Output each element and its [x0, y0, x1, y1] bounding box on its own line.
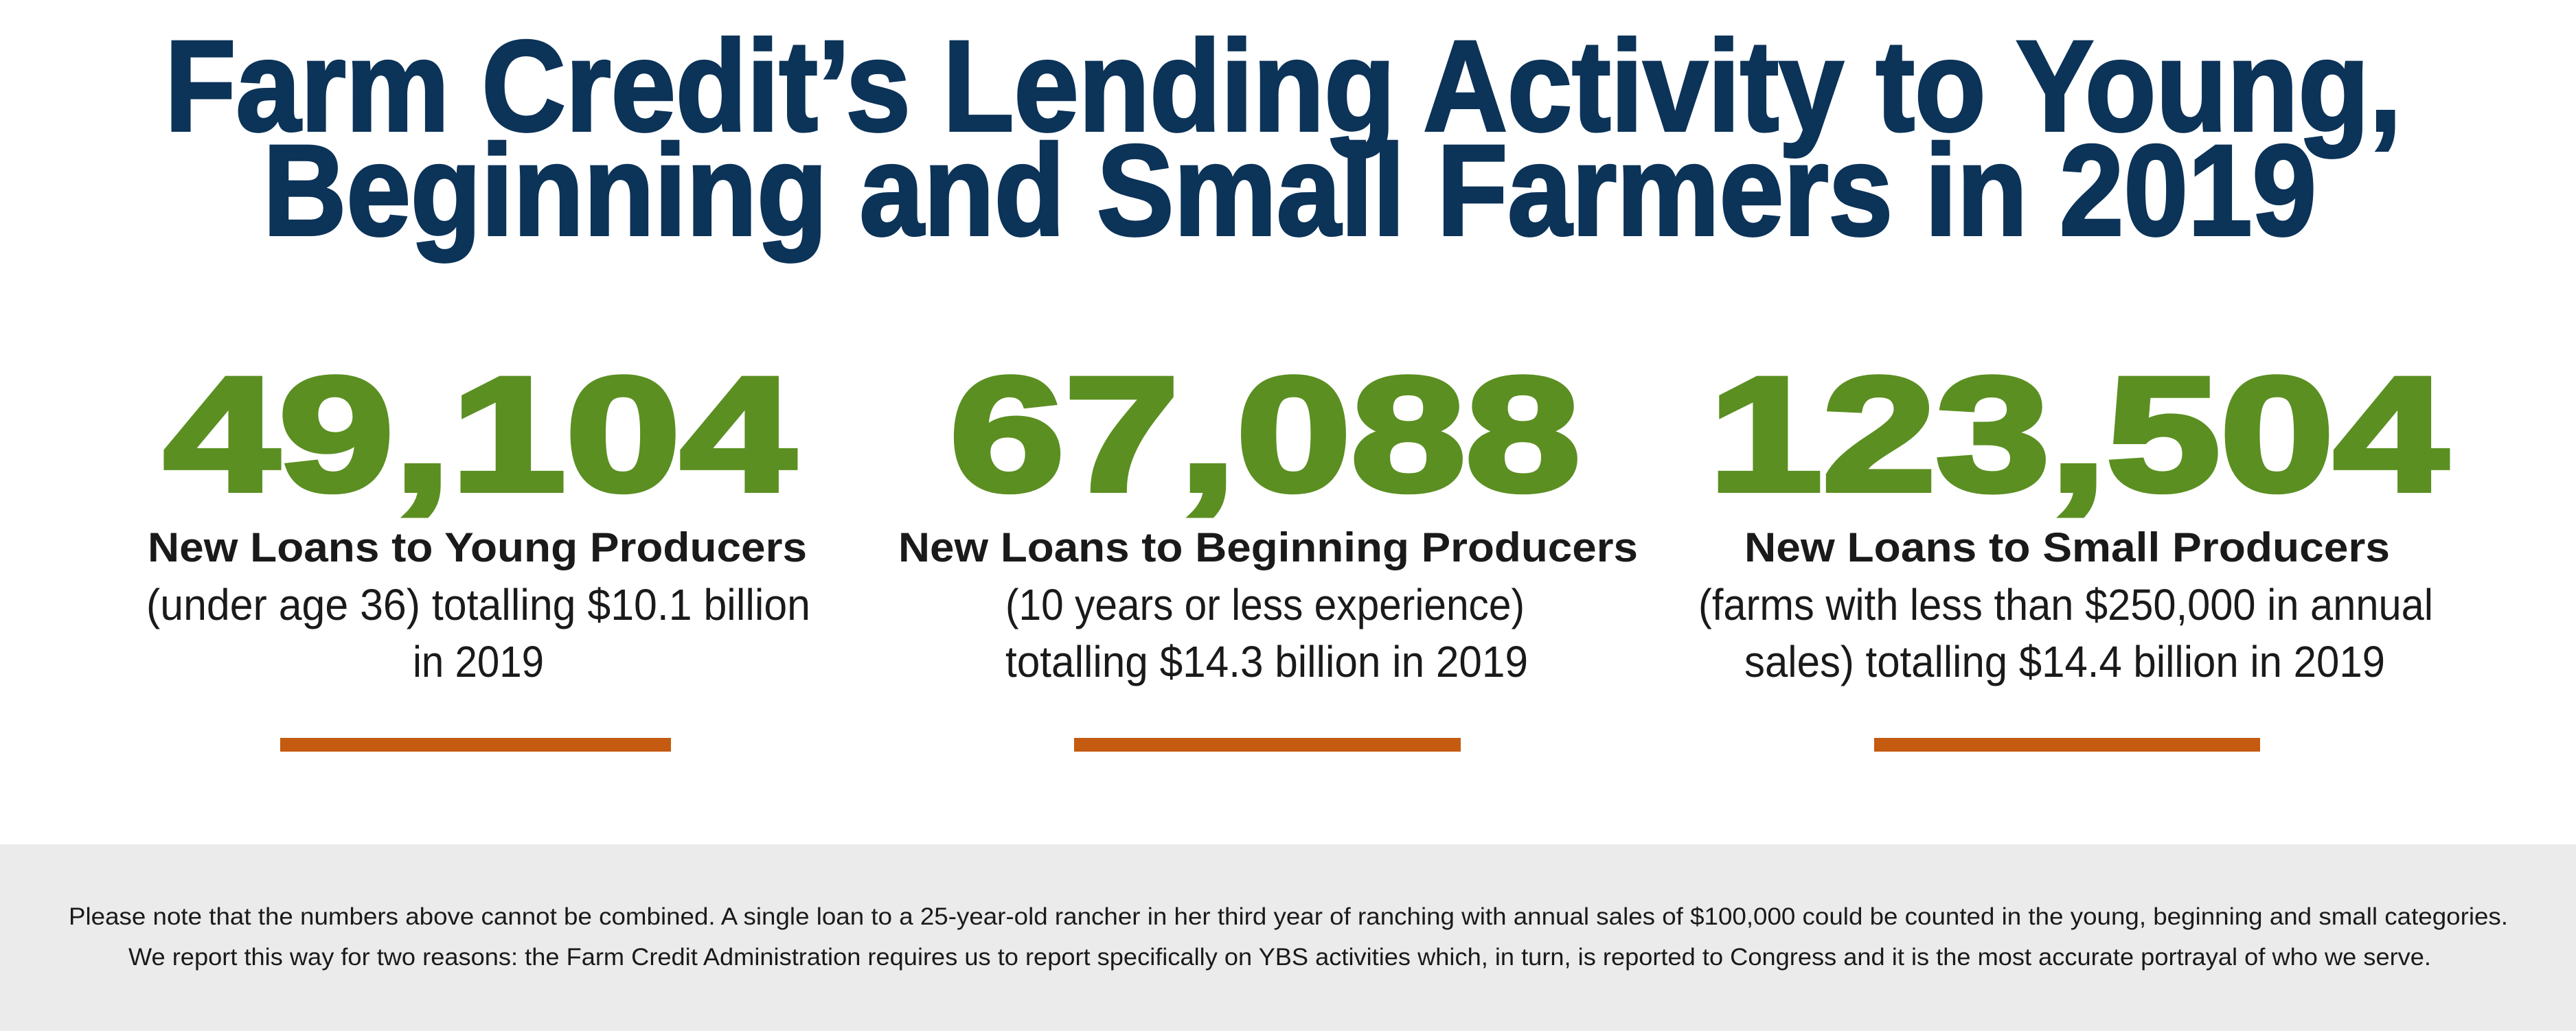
heading: young: New Loans to Young Producers: [148, 524, 807, 570]
divider bar: small: [1874, 738, 2260, 752]
description: beginning: totalling $14.3 billion in 2019: [1005, 637, 1528, 686]
description: small: [1698, 580, 2433, 686]
title: Beginning and Small Farmers in 2019: [263, 118, 2316, 262]
footer note text: Please note that the numbers above cannot be combined. A single loan to a 25-year-old rancher in her third year of ranching with annual sales of $100,000 could be counted in the young, beginning and small categories.: [69, 903, 2508, 930]
description: young: [146, 580, 810, 686]
footer panel: [0, 844, 2576, 1031]
description: young: (under age 36) totalling $10.1 billion: [146, 580, 810, 629]
number: beginning: 67,088: [950, 344, 1580, 525]
panel: small producers: [1698, 344, 2448, 752]
footer note text: [69, 903, 2508, 971]
description: beginning: (10 years or less experience): [1005, 580, 1525, 629]
footer note text: We report this way for two reasons: the Farm Credit Administration requires us to report specifically on YBS activities which, in turn, is reported to Congress and it is the most accurate portrayal of who we serve.: [128, 944, 2431, 971]
title: Farm Credit’s Lending Activity to Young,: [165, 14, 2402, 158]
panel: young producers: [146, 344, 810, 752]
description: young: in 2019: [413, 637, 544, 686]
divider bar: young: [280, 738, 671, 752]
description: small: (farms with less than $250,000 in annual: [1698, 580, 2433, 629]
heading: beginning: New Loans to Beginning Producers: [898, 524, 1638, 570]
description: small: sales) totalling $14.4 billion in 2019: [1744, 637, 2385, 686]
description: beginning: [1005, 580, 1528, 686]
number: young: 49,104: [164, 344, 795, 525]
number: small: 123,504: [1709, 344, 2448, 525]
title: [165, 14, 2402, 262]
panel: beginning producers: [898, 344, 1638, 752]
heading: small: New Loans to Small Producers: [1744, 524, 2390, 570]
divider bar: beginning: [1074, 738, 1461, 752]
